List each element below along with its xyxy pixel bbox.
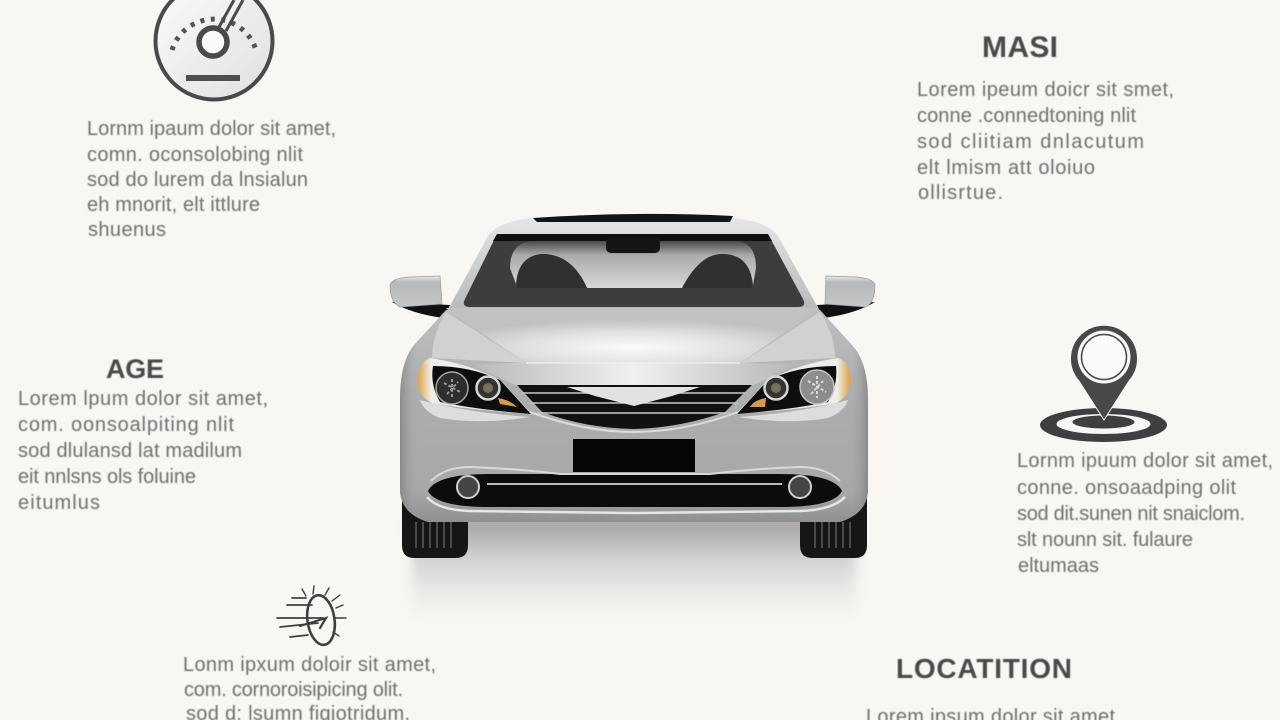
- text block: location description: conne. onsoaadping olit: [1017, 477, 1236, 499]
- text block: motion description: [183, 654, 436, 720]
- text block: age description: [18, 388, 268, 514]
- text block: speed description: comn. oconsolobing nlit: [87, 144, 303, 166]
- headlights: [417, 358, 851, 421]
- text block: motion description: Lonm ipxum doloir sit amet,: [183, 654, 436, 676]
- bumper chrome: [427, 497, 845, 513]
- text block: MASI description: sod cliitiam dnlacutum: [917, 131, 1144, 153]
- heading: AGE: AGE: [106, 354, 164, 384]
- text block: age description: sod dlulansd lat madilum: [18, 440, 242, 462]
- grille: [517, 385, 752, 432]
- icon: speedometer gauge: [156, 0, 272, 100]
- license plate: [573, 439, 695, 472]
- heading: LOCATITION: LOCATITION: [896, 653, 1072, 684]
- text block: age description: com. oonsoalpiting nlit: [18, 414, 234, 436]
- text block: location description: eltumaas: [1018, 555, 1099, 577]
- text block: MASI description: Lorem ipeum doicr sit smet,: [917, 79, 1174, 101]
- text block: speed description: [87, 118, 336, 241]
- heading: MASI: MASI: [982, 31, 1058, 64]
- text block: age description: eit nnlsns ols foluine: [18, 466, 196, 488]
- mirrors: [390, 276, 875, 318]
- hood: [432, 308, 835, 386]
- lower intake with fog lamps: [428, 467, 842, 507]
- windshield: [464, 234, 804, 307]
- icon: location pin on target: [1040, 325, 1167, 442]
- wheels: [402, 490, 867, 558]
- text block: motion description: com. cornoroisipicing olit.: [184, 679, 403, 701]
- text block: MASI description: elt lmism att oloiuo: [917, 157, 1095, 179]
- text block: MASI description: conne .connedtoning nlit: [917, 105, 1136, 127]
- text block: speed description: eh mnorit, elt ittlure: [87, 194, 260, 216]
- text block: location description: sod dit.sunen nit snaiclom.: [1017, 503, 1245, 525]
- text block: location description: [1017, 450, 1273, 577]
- main body: [400, 310, 868, 522]
- text block: speed description: Lornm ipaum dolor sit amet,: [87, 118, 336, 140]
- roof: [445, 215, 822, 315]
- ground shadow: [412, 516, 856, 620]
- text block: location description: Lornm ipuum dolor sit amet,: [1017, 450, 1273, 472]
- text block: speed description: shuenus: [88, 219, 166, 241]
- text block: location description: slt nounn sit. fulaure: [1017, 529, 1193, 551]
- text block: age description: eitumlus: [18, 492, 100, 514]
- text block: age description: Lorem lpum dolor sit amet,: [18, 388, 268, 410]
- text block: MASI description: [917, 79, 1174, 204]
- text block: MASI description: ollisrtue.: [918, 182, 1003, 204]
- car illustration: [390, 214, 875, 620]
- icon: fast motion emblem: [277, 586, 346, 647]
- text block: speed description: sod do lurem da lnsialun: [87, 169, 308, 191]
